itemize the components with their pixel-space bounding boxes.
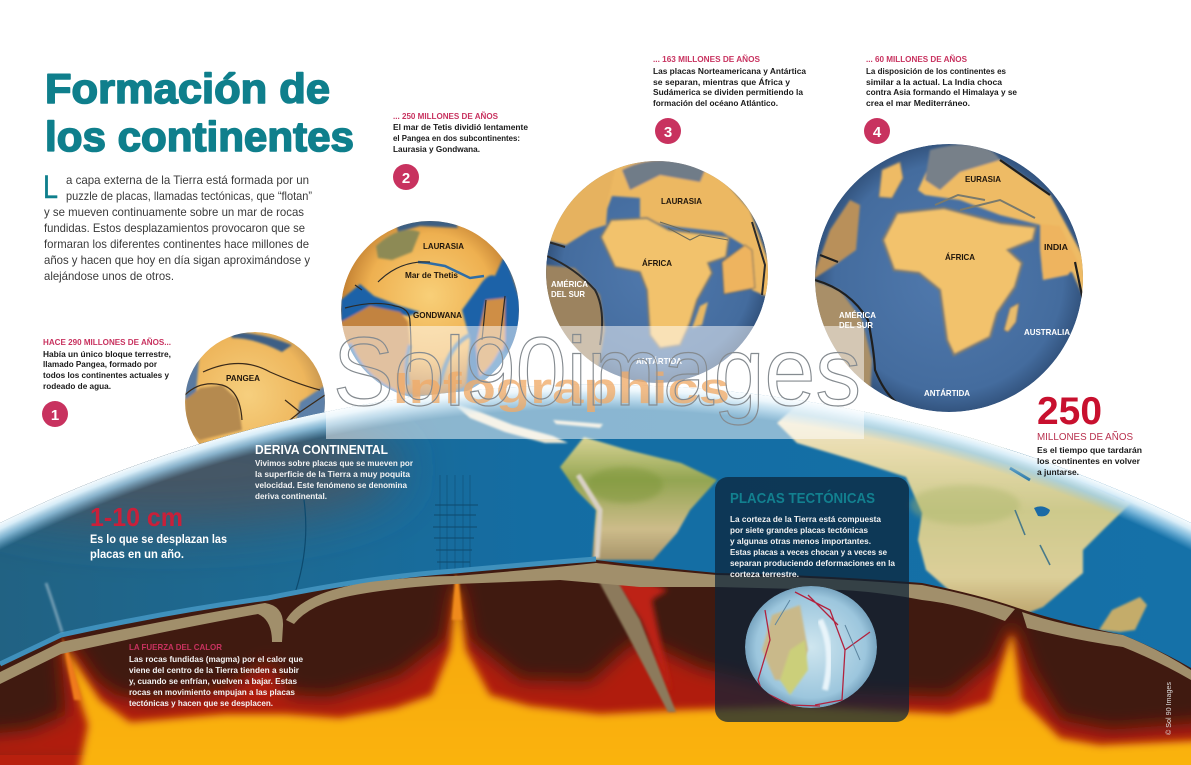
subduction melt [600, 564, 672, 695]
globe 2: Laurasia and Gondwana [341, 218, 520, 402]
step 4 text: La disposición de los continentes es [866, 66, 1006, 76]
label: Gondwana: GONDWANA [413, 311, 462, 320]
step 2 text: El mar de Tetis dividió lentamente [393, 122, 528, 132]
step 1 text: HACE 290 MILLONES DE AÑOS... [43, 337, 171, 347]
panel text: La corteza de la Tierra está compuesta [730, 514, 881, 524]
label: Laurasia: LAURASIA [423, 242, 464, 251]
deriva continental text: DERIVA CONTINENTAL [255, 442, 388, 457]
intro paragraph: y se mueven continuamente sobre un mar de rocas [44, 205, 304, 219]
title [45, 65, 354, 160]
label: América del Sur: AMÉRICA [839, 310, 876, 320]
label: Antártida: ANTÁRTIDA [636, 356, 682, 366]
deriva continental text [255, 442, 414, 501]
bottom red corner [0, 755, 84, 765]
stat: 250 millones de años: MILLONES DE AÑOS [1037, 430, 1133, 443]
number badge 2 [393, 164, 419, 190]
North America and Caribbean [453, 403, 603, 443]
la fuerza del calor text [129, 642, 303, 708]
la fuerza del calor text: LA FUERZA DEL CALOR [129, 642, 222, 652]
step 3 text: Sudámerica se dividen permitiendo la [653, 87, 803, 97]
red glow layer [0, 580, 1191, 765]
intro paragraph: alejándose unos de otros. [44, 269, 174, 283]
number badge 4: 4 [873, 124, 882, 141]
number badge 3: 3 [664, 124, 672, 141]
number badge 1 [42, 401, 68, 427]
subducting plate [590, 565, 676, 712]
intro paragraph: años y hacen que hoy en día sigan aproximándose y [44, 253, 310, 267]
intro paragraph: formaran los diferentes continentes hace millones de [44, 237, 309, 251]
big Earth with ocean and continents [0, 384, 1191, 668]
crater smoke on the left volcano [46, 583, 62, 632]
label: India: INDIA [1044, 243, 1068, 252]
stat: 250 millones de años: 250 [1037, 390, 1102, 433]
globe 4: Eurasia, África, India, Australia, Antártida [805, 144, 1085, 412]
step 2 text: ... 250 MILLONES DE AÑOS [393, 111, 498, 121]
shaded night side of the ocean [0, 415, 400, 525]
Amazon green [587, 467, 663, 503]
crust band [0, 563, 1191, 684]
stat: 250 millones de años: a juntarse. [1037, 467, 1079, 477]
bottom magma pool [100, 757, 1191, 765]
label: Eurasia: EURASIA [965, 175, 1001, 184]
globe 1: Pangea [185, 332, 325, 444]
step 2 text: el Pangea en dos subcontinentes: [393, 133, 520, 143]
panel text: Estas placas a veces chocan y a veces se [730, 547, 887, 557]
label: Australia: AUSTRALIA [1024, 328, 1070, 337]
label: Mar de Tetis: Mar de Thetis [405, 271, 458, 280]
la fuerza del calor text: y, cuando se enfrían, vuelven a bajar. Estas [129, 676, 297, 686]
deriva continental text: Vivimos sobre placas que se mueven por [255, 458, 414, 468]
stat: 1-10 cm [90, 502, 227, 561]
step 1 text: todos los continentes actuales y [43, 370, 169, 380]
stat: 250 millones de años [1037, 390, 1142, 477]
step 1 text: llamado Pangea, formado por [43, 359, 158, 369]
label: Laurasia: LAURASIA [661, 197, 702, 206]
number badge 1: 1 [51, 407, 59, 424]
title: los continentes [45, 113, 354, 160]
label: África: ÁFRICA [642, 258, 672, 268]
drop cap: L [43, 169, 58, 205]
Africa [777, 402, 1131, 620]
trench line [296, 500, 306, 590]
globe 4: Eurasia, África, India, Australia, Antártida: DEL SUR [839, 321, 873, 330]
deriva continental text: la superficie de la Tierra a muy poquita [255, 469, 410, 479]
step 3 text: ... 163 MILLONES DE AÑOS [653, 54, 760, 64]
step 3 text: se separan, mientras que África y [653, 77, 790, 87]
African lakes [1034, 506, 1050, 516]
step 1 text [43, 337, 171, 391]
la fuerza del calor text: rocas en movimiento empujan a las placas [129, 687, 295, 697]
vent streaks [62, 637, 82, 700]
panel text: por siete grandes placas tectónicas [730, 525, 868, 535]
step 3 text: Las placas Norteamericana y Antártica [653, 66, 806, 76]
label: América del Sur: AMÉRICA [551, 279, 588, 289]
panel: placas tectónicas [715, 477, 909, 722]
Red Sea [1004, 448, 1124, 501]
inset globe with plate boundaries [745, 586, 877, 708]
step 3 text: formación del océano Atlántico. [653, 98, 778, 108]
panel text [730, 514, 895, 579]
label: África: ÁFRICA [945, 252, 975, 262]
watermark orange text: Infographics [393, 364, 730, 413]
stat: 1-10 cm: 1-10 cm [90, 502, 183, 532]
step 3 text [653, 54, 806, 108]
yellow magma layer [64, 590, 1191, 765]
Sahel green tint [910, 485, 1020, 525]
la fuerza del calor text: Las rocas fundidas (magma) por el calor que [129, 654, 303, 664]
number badge 3 [655, 118, 681, 144]
intro paragraph: a capa externa de la Tierra está formada por un [66, 173, 309, 187]
stat: 250 millones de años: los continentes en volver [1037, 456, 1141, 466]
step 2 text: Laurasia y Gondwana. [393, 144, 480, 154]
copyright: © Sol 90 Images [1165, 681, 1173, 735]
step 4 text: ... 60 MILLONES DE AÑOS [866, 54, 967, 64]
la fuerza del calor text: viene del centro de la Tierra tienden a subir [129, 665, 300, 675]
step 4 text: similar a la actual. La India choca [866, 77, 1002, 87]
step 2 text [393, 111, 528, 154]
step 1 text: rodeado de agua. [43, 381, 111, 391]
stat: 1-10 cm: Es lo que se desplazan las [90, 532, 227, 546]
globe 3: Laurasia, África, América del Sur: DEL SUR [551, 290, 585, 299]
title: Formación de [45, 65, 330, 112]
step 4 text [866, 54, 1017, 108]
South America [560, 437, 717, 560]
Madagascar [1099, 597, 1147, 632]
Andes [578, 475, 600, 558]
intro paragraph: puzzle de placas, llamadas tectónicas, que “flotan” [66, 189, 312, 203]
label: Pangea: PANGEA [226, 374, 260, 383]
globe 3: Laurasia, África, América del Sur [542, 155, 775, 383]
cutaway: mantle and magma [0, 555, 1191, 765]
intro paragraph: fundidas. Estos desplazamientos provocaron que se [44, 221, 305, 235]
step 1 text: Había un único bloque terrestre, [43, 349, 171, 359]
panel text: separan produciendo deformaciones en la [730, 558, 895, 568]
mid-ocean ridge lines [433, 475, 478, 570]
step 4 text: crea el mar Mediterráneo. [866, 98, 970, 108]
stat: 1-10 cm: placas en un año. [90, 547, 184, 561]
panel text: corteza terrestre. [730, 569, 799, 579]
panel text: y algunas otras menos importantes. [730, 536, 871, 546]
sea layer over crust [0, 559, 596, 664]
number badge 4 [864, 118, 890, 144]
intro paragraph [43, 169, 312, 283]
deriva continental text: deriva continental. [255, 491, 327, 501]
label: Antártida: ANTÁRTIDA [924, 388, 970, 398]
heading: PLACAS TECTÓNICAS [730, 489, 875, 507]
dark mantle base [0, 555, 1191, 765]
step 4 text: contra Asia formando el Himalaya y se [866, 87, 1017, 97]
watermark outline text: Sol90images [333, 317, 861, 426]
la fuerza del calor text: tectónicas y hacen que se desplacen. [129, 698, 273, 708]
stat: 250 millones de años: Es el tiempo que tardarán [1037, 445, 1142, 455]
atmosphere rim [0, 384, 1191, 550]
watermark band [326, 317, 864, 439]
deriva continental text: velocidad. Este fenómeno se denomina [255, 480, 407, 490]
number badge 2: 2 [402, 170, 410, 187]
